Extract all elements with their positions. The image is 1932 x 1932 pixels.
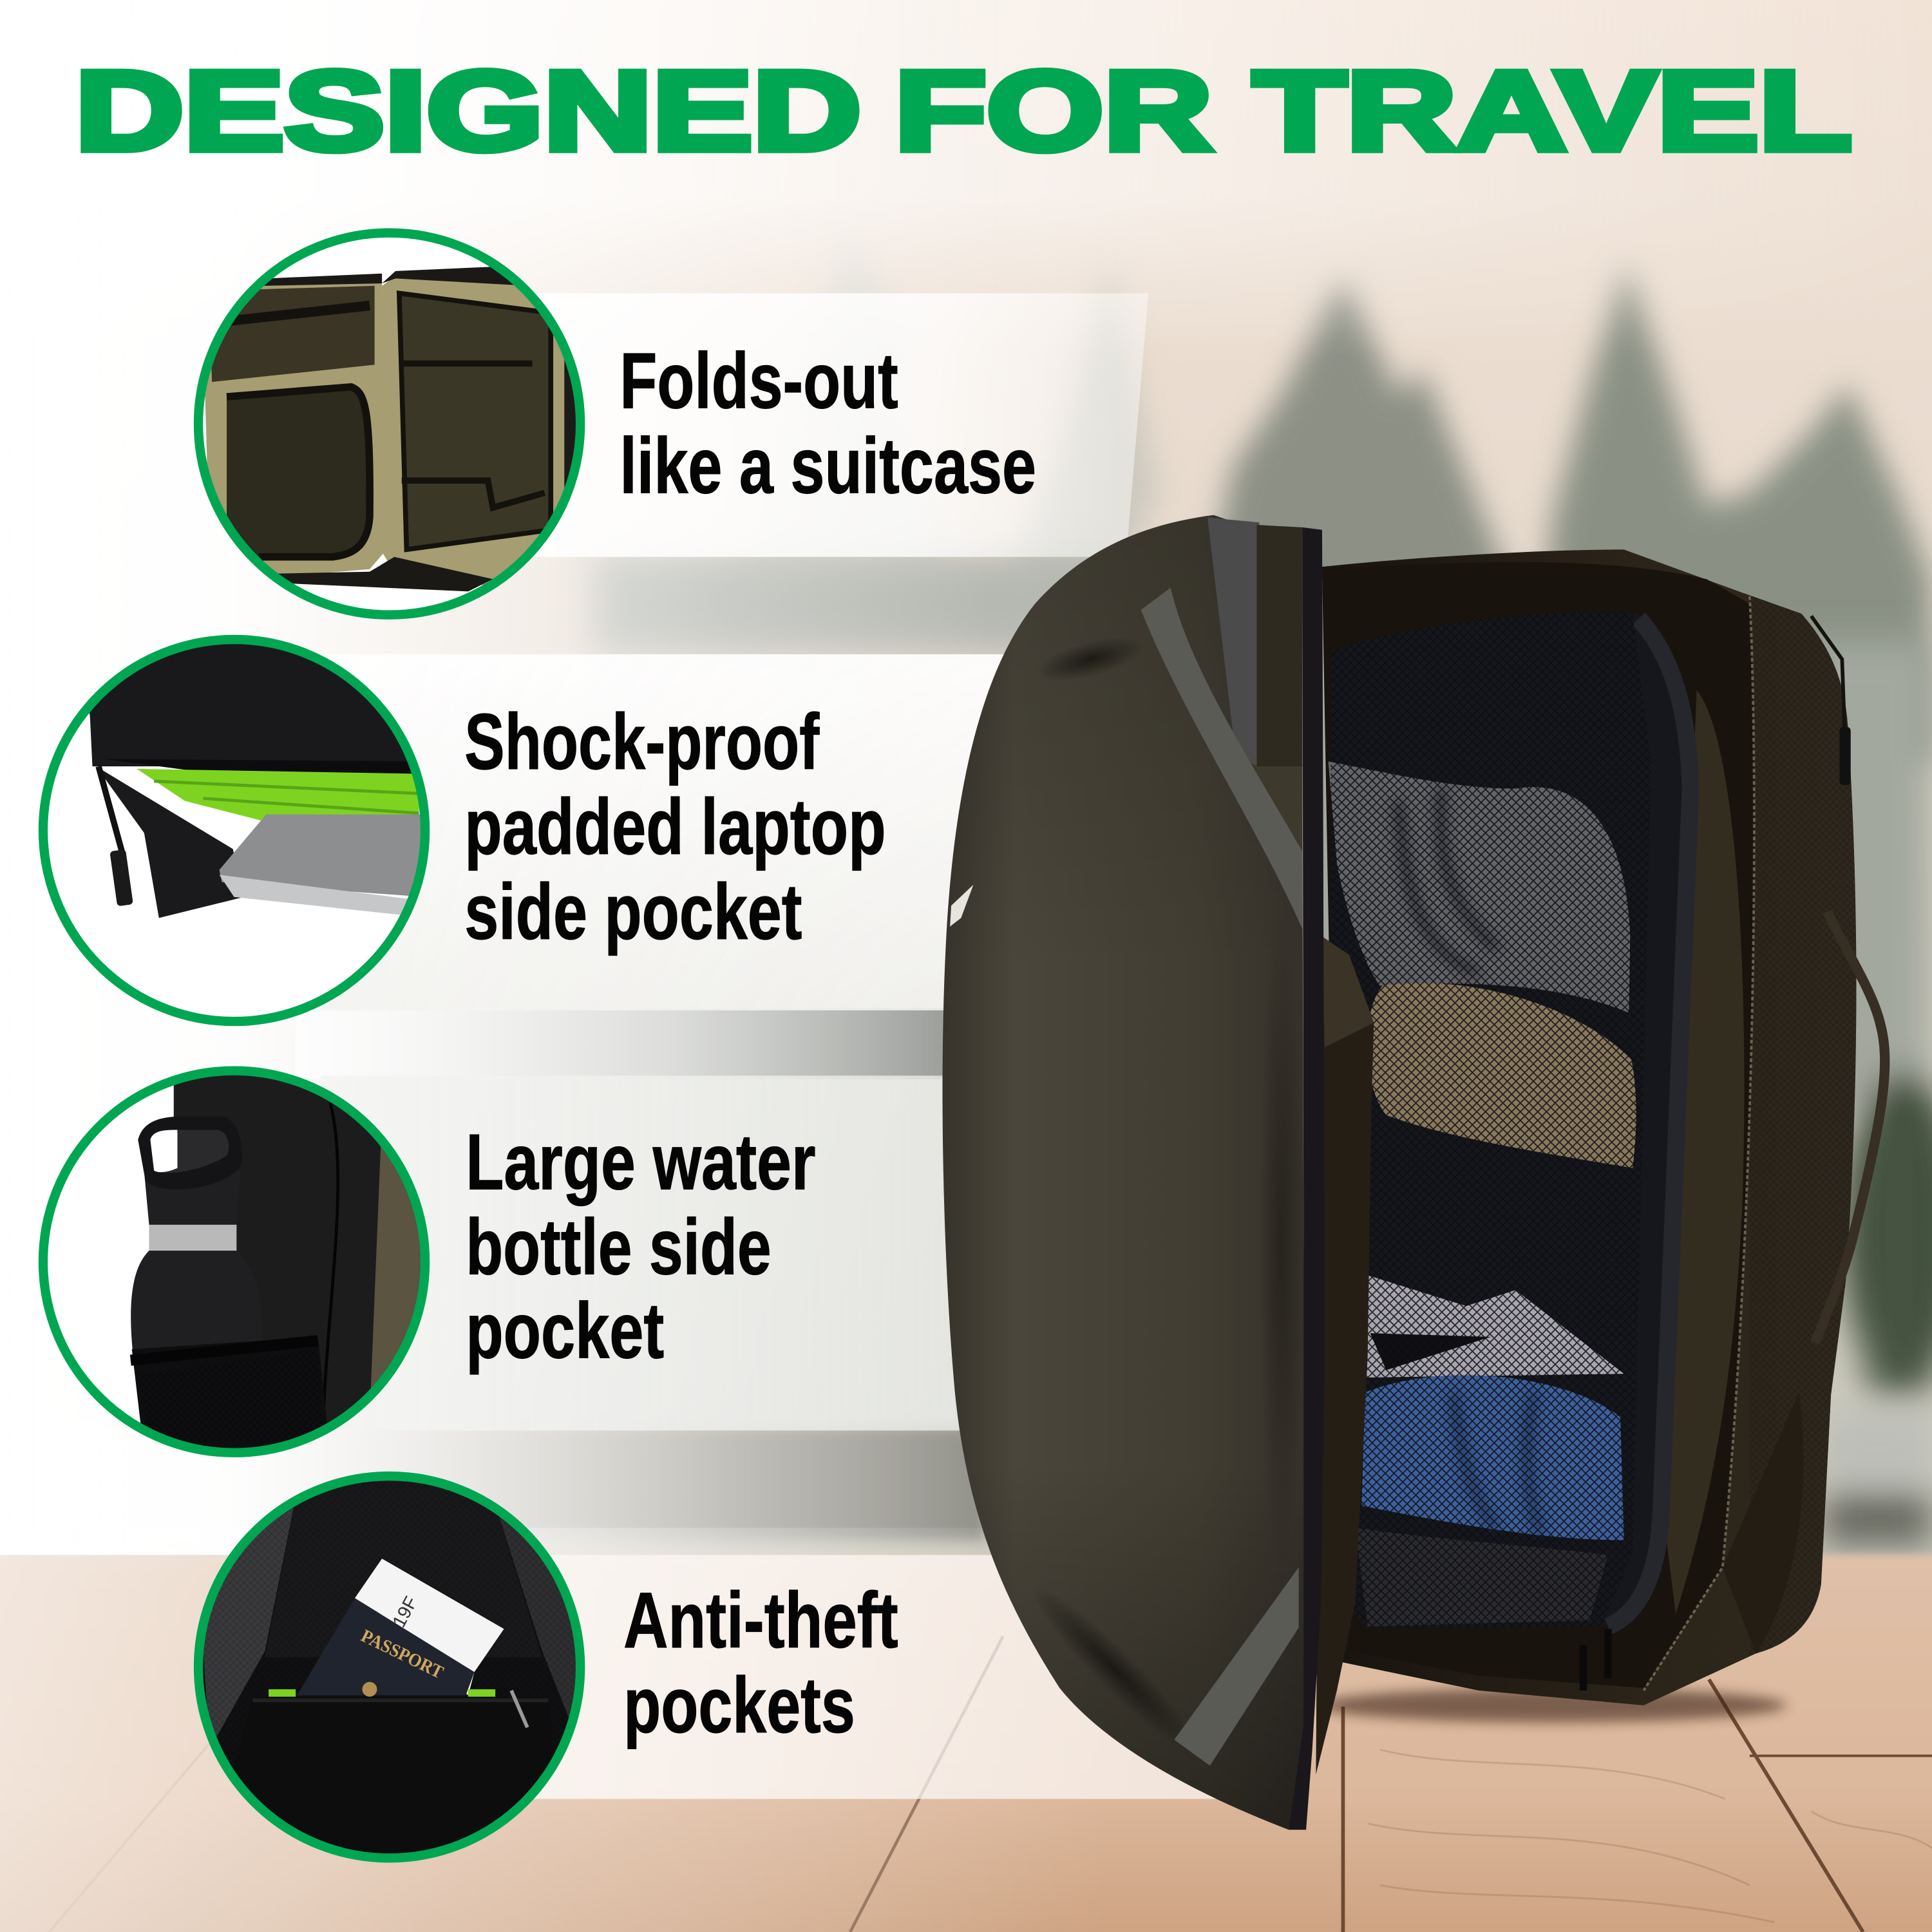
body fabric texture [1723,596,1856,1655]
feature 2 circle: laptop pocket [37,629,431,1029]
front flap [942,515,1306,1830]
zip pull right [1811,616,1844,727]
grey clothes [1328,761,1630,1013]
text: folds-out like a suitcase: Folds-out [620,336,898,424]
zipper edge strip [1289,527,1325,1830]
tan clothes [1367,983,1636,1168]
text: anti-theft pockets [623,1576,898,1749]
text: folds-out like a suitcase: like a suitcase [620,421,1036,509]
text: shock-proof padded laptop side pocket [464,697,886,956]
flap spine [1208,518,1259,766]
bottom zip pulls [1584,1629,1608,1690]
lower mesh fabric [1356,1528,1608,1627]
dark strap over clothes [1370,1333,1491,1370]
text: folds-out like a suitcase [620,336,1036,509]
bottle [131,1172,263,1356]
panel: feature strip 2 [320,654,1109,1010]
grey straps [1141,588,1302,929]
blue clothes [1361,1375,1624,1540]
feature 4 circle: anti-theft pocket with passport: PASSPORT [358,1625,446,1683]
panel: feature strip 4 [370,1555,1306,1799]
text: shock-proof padded laptop side pocket: padded laptop [464,782,886,871]
floor shadow [1318,1688,1786,1723]
grey band above the table [0,1427,986,1540]
feature 3 circle: water bottle pocket [37,1066,431,1460]
feature 4 circle: anti-theft pocket with passport: 19F [389,1593,422,1631]
flap creases [1018,628,1303,1766]
inner flap edge [1316,936,1374,1774]
title [75,48,1852,174]
flap shoulder [1214,739,1302,862]
feature 4 circle: anti-theft pocket with passport [197,1472,582,1861]
text: large water bottle side pocket: Large water [466,1117,816,1206]
text: large water bottle side pocket: pocket [466,1286,664,1374]
backpack interior [1322,562,1754,1688]
interior lining [1663,690,1745,1614]
right half [382,271,574,587]
text: large water bottle side pocket [466,1117,816,1374]
title: FOR [895,48,1213,174]
green zip lining [269,1689,495,1697]
text: shock-proof padded laptop side pocket: side pocket [464,867,802,956]
text: large water bottle side pocket: bottle side [466,1202,772,1291]
feature 1 circle: opened bag [197,232,587,616]
body zipper [1643,596,1754,1690]
backpack body [1322,549,1856,1705]
boarding pass [355,1558,504,1696]
text: shock-proof padded laptop side pocket: Shock-proof [464,697,820,786]
title: DESIGNED [75,48,861,174]
flap logo mark [950,885,973,927]
packing cube mesh [1331,612,1697,1629]
left half [202,278,384,579]
side handle [1815,912,1885,1343]
text: anti-theft pockets: pockets [623,1661,855,1749]
panel: feature strip 1 [370,293,1148,557]
mesh overlay [1331,612,1651,1629]
text: anti-theft pockets: Anti-theft [623,1576,898,1664]
panel: feature strip 3 [320,1075,1109,1430]
backpack product image [942,515,1885,1830]
grey band between strips 2 and 3 [296,1008,986,1079]
title: TRAVEL [1253,48,1852,174]
lavender clothes [1365,1275,1624,1378]
passport [297,1598,475,1696]
